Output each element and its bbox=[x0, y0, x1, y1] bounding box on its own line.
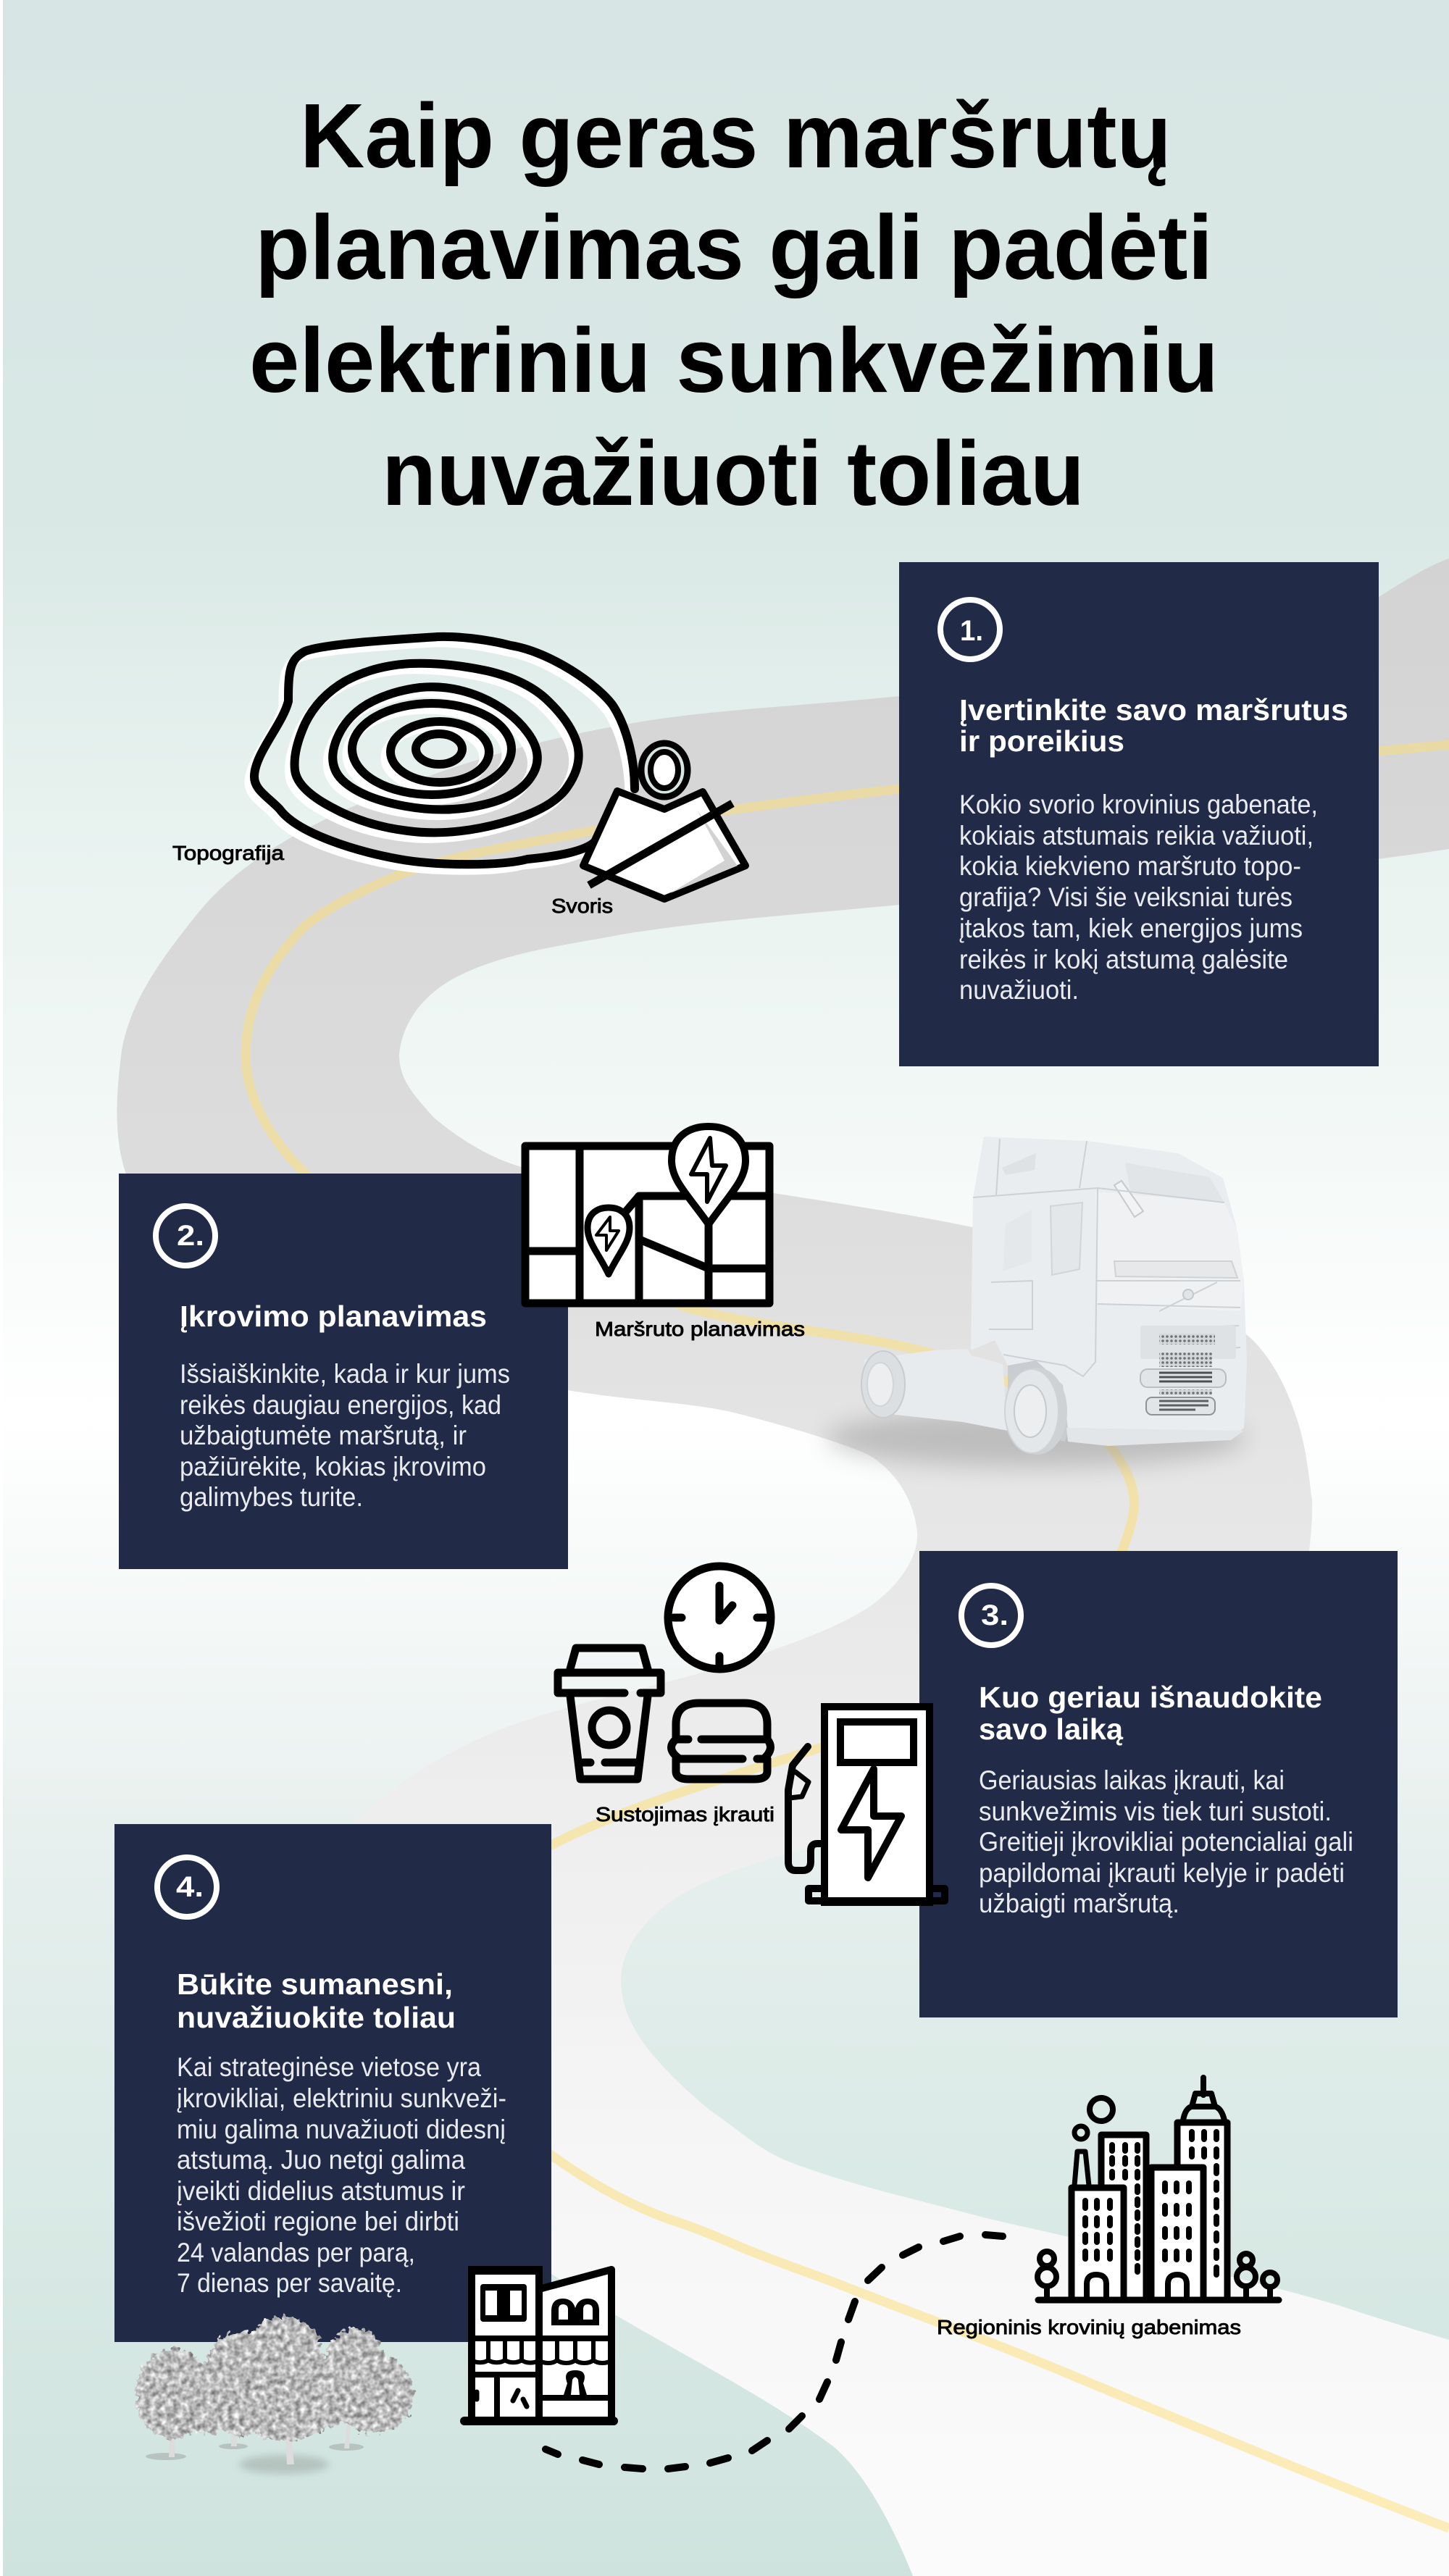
panel: step 3: Geriausias laikas įkrauti, kai bbox=[979, 1765, 1285, 1795]
title: Kaip geras maršrutų bbox=[300, 85, 1172, 187]
icon: weight bbox=[583, 743, 746, 899]
panel: step 2: pažiūrėkite, kokias įkrovimo bbox=[180, 1452, 486, 1481]
panel: step 1: ir poreikius bbox=[959, 724, 1124, 758]
panel: step 1: kokia kiekvieno maršruto topo- bbox=[959, 851, 1301, 881]
panel: step 4: išvežioti regione bei dirbti bbox=[177, 2207, 459, 2236]
icon: coffee cup bbox=[558, 1648, 661, 1779]
label: charging stop: Sustojimas įkrauti bbox=[596, 1803, 774, 1826]
panel: step 2: 2. bbox=[177, 1220, 204, 1252]
icon: route map bbox=[525, 1126, 769, 1303]
title: nuvažiuoti toliau bbox=[382, 422, 1085, 524]
title bbox=[249, 85, 1219, 524]
label: regional transport: Regioninis krovinių gabenimas bbox=[937, 2316, 1241, 2338]
panel: step 2: galimybes turite. bbox=[180, 1482, 363, 1512]
panel: step 3: užbaigti maršrutą. bbox=[979, 1889, 1179, 1918]
panel: step 4: 4. bbox=[176, 1871, 204, 1903]
panel: step 2: reikės daugiau energijos, kad bbox=[180, 1390, 501, 1420]
panel: step 4: įveikti didelius atstumus ir bbox=[177, 2176, 465, 2206]
panel: step 2 bbox=[119, 1174, 568, 1569]
panel: step 1: Įvertinkite savo maršrutus bbox=[959, 693, 1348, 727]
truck bbox=[826, 1137, 1247, 1467]
panel: step 3: Kuo geriau išnaudokite bbox=[979, 1681, 1322, 1714]
panel: step 4: Kai strateginėse vietose yra bbox=[177, 2052, 481, 2082]
panel: step 2: Išsiaiškinkite, kada ir kur jums bbox=[180, 1359, 510, 1389]
panel: step 3: savo laiką bbox=[979, 1713, 1124, 1746]
icon: shops bbox=[464, 2266, 614, 2421]
icon: topography map bbox=[249, 637, 635, 870]
title: elektriniu sunkvežimiu bbox=[249, 309, 1219, 411]
panel: step 1: Kokio svorio krovinius gabenate, bbox=[959, 790, 1318, 819]
title: planavimas gali padėti bbox=[255, 196, 1213, 298]
panel: step 3: 3. bbox=[981, 1599, 1009, 1631]
icon: charging station bbox=[788, 1707, 945, 1902]
panel: step 4: 24 valandas per parą, bbox=[177, 2238, 415, 2267]
label: route planning: Maršruto planavimas bbox=[595, 1318, 805, 1340]
trees bbox=[135, 2317, 414, 2474]
panel: step 1: reikės ir kokį atstumą galėsite bbox=[959, 945, 1288, 974]
panel: step 4: Būkite sumanesni, bbox=[177, 1967, 453, 2001]
panel: step 1: grafija? Visi šie veiksniai turės bbox=[959, 882, 1293, 912]
panel: step 3 bbox=[919, 1551, 1398, 2017]
panel: step 2: Įkrovimo planavimas bbox=[180, 1300, 487, 1333]
icon: city bbox=[1037, 2078, 1279, 2300]
panel: step 4 bbox=[114, 1824, 551, 2342]
panel: step 4: įkrovikliai, elektriniu sunkveži- bbox=[177, 2083, 506, 2113]
dashed route bbox=[546, 2235, 1003, 2469]
panel: step 1: įtakos tam, kiek energijos jums bbox=[959, 913, 1303, 943]
panel: step 1 bbox=[899, 562, 1379, 1066]
road centre line bbox=[246, 745, 1449, 2528]
panel: step 3: papildomai įkrauti kelyje ir padėti bbox=[979, 1858, 1345, 1888]
panel: step 4: miu galima nuvažiuoti didesnį bbox=[177, 2115, 506, 2144]
winding road bbox=[117, 559, 1449, 2576]
label: weight: Svoris bbox=[551, 895, 613, 917]
panel: step 2: užbaigtumėte maršrutą, ir bbox=[180, 1421, 467, 1450]
panel: step 1: 1. bbox=[960, 615, 983, 647]
panel: step 4: 7 dienas per savaitę. bbox=[177, 2268, 402, 2298]
panel: step 3: Greitieji įkrovikliai potencialiai gali bbox=[979, 1827, 1353, 1857]
panel: step 1: nuvažiuoti. bbox=[959, 975, 1079, 1005]
label: topography: Topografija bbox=[172, 842, 284, 864]
left edge strip bbox=[0, 0, 3, 2576]
icon: clock bbox=[668, 1566, 771, 1669]
panel: step 1: kokiais atstumais reikia važiuoti, bbox=[959, 821, 1314, 850]
panel: step 3: sunkvežimis vis tiek turi sustoti. bbox=[979, 1797, 1332, 1826]
panel: step 4: nuvažiuokite toliau bbox=[177, 2001, 456, 2034]
panel: step 4: atstumą. Juo netgi galima bbox=[177, 2145, 465, 2175]
icon: burger bbox=[672, 1703, 770, 1779]
